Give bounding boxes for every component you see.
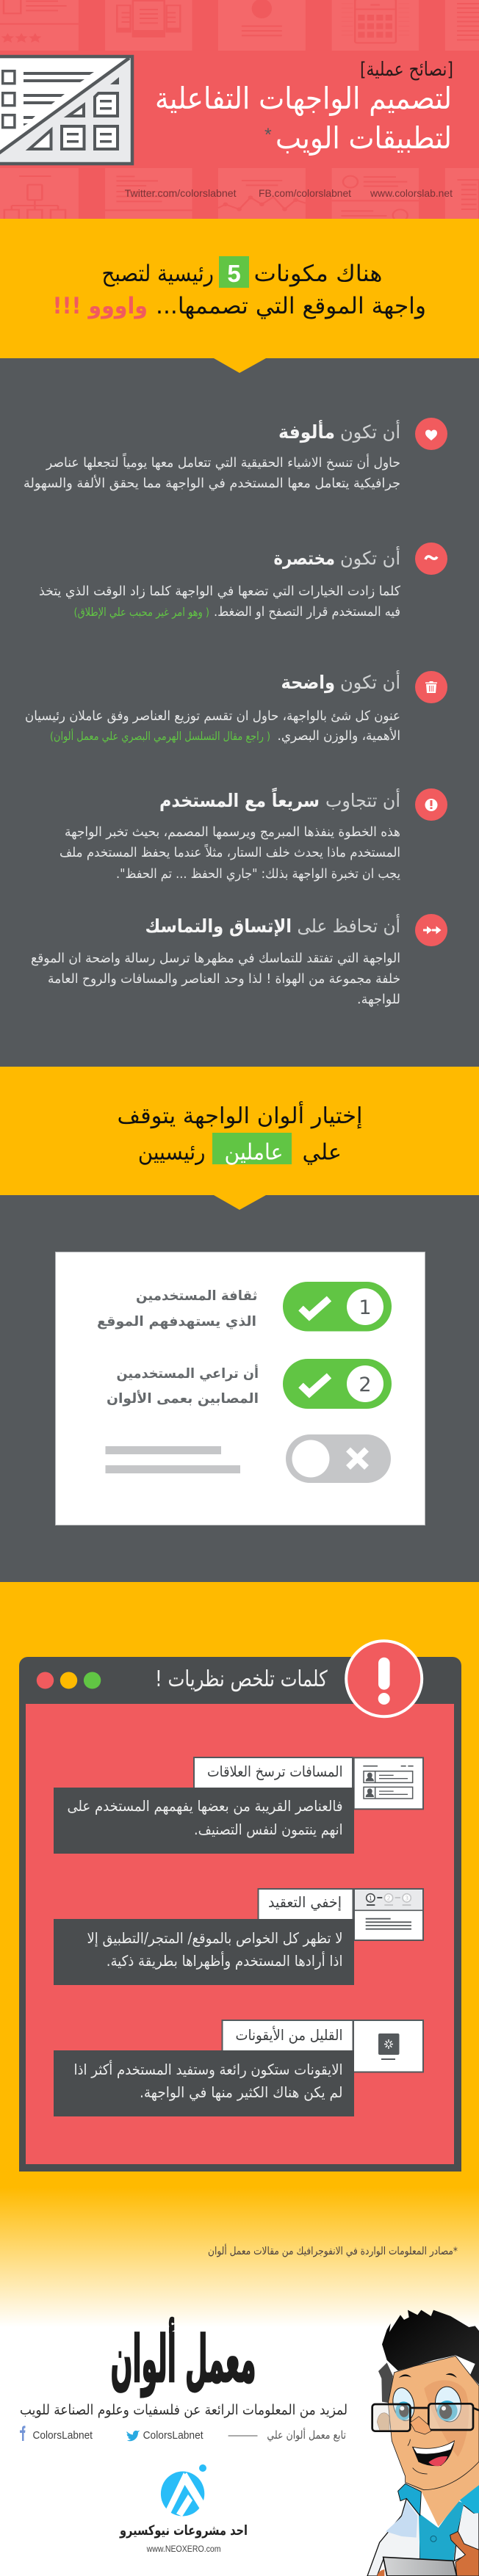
intro line 2: واووو !!! — [53, 293, 148, 319]
panel: colors banner — [0, 1067, 479, 1195]
icon: alert badge — [346, 1641, 422, 1716]
factor 1 text — [97, 1288, 257, 1330]
item 4: سريعاً مع المستخدم — [159, 788, 320, 812]
background pattern: top tiles — [0, 0, 479, 51]
icon: steps: 3 — [405, 1895, 408, 1901]
description: لم يكن هناك الكثير منها في الواجهة. — [140, 2083, 342, 2102]
twitter handle: ColorsLabnet — [143, 2429, 204, 2442]
intro line 1: هناك مكونات — [254, 261, 382, 287]
intro line 1: رئيسية لتصبح — [101, 261, 214, 287]
panel: five components — [0, 358, 479, 1067]
asterisk: * — [264, 125, 272, 145]
placeholder lines — [106, 1446, 240, 1473]
window title: كلمات تلخص نظريات ! — [155, 1666, 328, 1692]
character: scientist — [367, 2310, 479, 2576]
title line 2: لتطبيقات الويب — [275, 120, 452, 156]
heading line 2: علي — [303, 1139, 342, 1166]
description: الايقونات ستكون رائعة وستفيد المستخدم أكثر اذا — [73, 2060, 342, 2078]
arrow — [214, 358, 266, 373]
description — [54, 1919, 354, 1985]
social links: Twitter.com/colorslabnet — [125, 187, 237, 199]
social links: FB.com/colorslabnet — [259, 187, 351, 199]
item 2: أن تكون — [340, 545, 400, 569]
item 5 — [31, 913, 447, 1007]
hand — [450, 2531, 479, 2576]
eye right — [433, 2385, 464, 2423]
number badge: 5 — [227, 260, 241, 287]
item 4 — [60, 788, 447, 882]
nose — [410, 2417, 431, 2434]
back hair — [378, 2362, 393, 2403]
toggle 2: 2 — [359, 1374, 372, 1396]
social links: www.colorslab.net — [370, 187, 453, 199]
heading line 2: رئيسيين — [138, 1139, 205, 1166]
mouth — [413, 2441, 454, 2466]
ear — [377, 2413, 389, 2431]
description — [54, 1788, 354, 1854]
item 2: مختصرة — [273, 548, 335, 570]
heading line 2 — [138, 1133, 342, 1166]
item 2: فيه المستخدم قرار التصفح او الضغط. — [214, 604, 400, 620]
item 4: أن تتجاوب — [325, 788, 400, 812]
panel: theories section background — [0, 1582, 479, 2327]
panel: color factors — [0, 1195, 479, 1582]
intro line 2: واجهة الموقع التي تصممها... — [156, 293, 426, 319]
item 5: الواجهة التي تفتقد للتماسك في مظهرها ترسل رسالة واضحة ان الموقع — [31, 951, 400, 966]
item 5: الإتساق والتماسك — [145, 915, 292, 937]
icon: alert — [415, 788, 447, 821]
item 2: ( وهو امر غير محبب علي الإطلاق) — [73, 606, 209, 620]
item 1: مألوفة — [278, 420, 335, 443]
icon: twitter — [126, 2430, 140, 2441]
item 1: حاول أن تنسخ الاشياء الحقيقية التي تتعامل معها يومياً لتجعلها عناصر — [46, 453, 400, 471]
item 2: كلما زادت الخيارات التي تضعها في الواجهة كلما زاد الوقت الذي يتخذ — [39, 584, 400, 599]
follow row — [20, 2426, 346, 2442]
item 5: خلفة مجموعة من الهواة ! لذا وحد العناصر والمسافات والروح العامة — [48, 971, 400, 987]
facebook handle: ColorsLabnet — [32, 2429, 93, 2442]
coat — [367, 2498, 420, 2576]
item 1: جرافيكية يتعامل معها المستخدم في الواجهة مما يحقق الألفة والسهولة — [24, 475, 400, 491]
icon: facebook — [20, 2426, 25, 2441]
panel: window — [19, 1641, 461, 2172]
toggle 3 — [286, 1434, 391, 1483]
label: القليل من الأيقونات — [235, 2026, 342, 2044]
description: لا تظهر كل الخواص بالموقع/ المتجر/التطبيق إلا — [87, 1929, 342, 1948]
panel: intro banner — [0, 219, 479, 358]
background pattern: bottom tiles — [0, 168, 479, 222]
card: spacing — [54, 1757, 423, 1854]
description — [54, 2050, 354, 2116]
heading line 1: إختيار ألوان الواجهة يتوقف — [118, 1100, 363, 1129]
face — [388, 2356, 479, 2490]
label — [222, 2020, 353, 2051]
icon: arrows — [415, 914, 447, 946]
toggle 2 — [283, 1359, 392, 1409]
shirt — [419, 2501, 464, 2561]
icon: steps: 1 — [369, 1895, 372, 1901]
item 4: يجب ان تخبرة الواجهة بذلك: "جاري الحفظ ... تم الحفظ". — [116, 866, 400, 882]
icon: heart — [415, 418, 447, 450]
heading line 2: عاملين — [225, 1139, 284, 1166]
icon: wave — [415, 543, 447, 575]
icon: steps — [354, 1889, 423, 1940]
item 4: هذه الخطوة ينفذها المبرمج ويرسمها المصمم، بحيث تخبر الواجهة — [65, 824, 400, 840]
item 3: الأهمية، والوزن البصري. — [278, 728, 400, 744]
panel: header — [0, 0, 479, 222]
item 3: أن تكون — [340, 670, 400, 693]
toggle 1 — [283, 1282, 392, 1332]
label: إخفي التعقيد — [268, 1893, 342, 1912]
label: المسافات ترسخ العلاقات — [207, 1763, 342, 1780]
item 1 — [24, 418, 447, 491]
arrow — [214, 1195, 266, 1210]
chin line — [408, 2439, 428, 2474]
footer tagline: لمزيد من المعلومات الرائعة عن فلسفيات وعلوم الصناعة للويب — [20, 2402, 347, 2418]
description: اذا أرادها المستخدم وأظهراها بطريقة ذكية. — [107, 1951, 342, 1970]
icon: spinner tile — [353, 2020, 423, 2072]
glasses — [372, 2403, 473, 2431]
item 2 — [39, 543, 447, 620]
item 3 — [25, 670, 447, 744]
icon: list — [354, 1757, 423, 1809]
neoxero url: www.NEOXERO.com — [146, 2544, 221, 2554]
toggle 1: 1 — [359, 1296, 372, 1319]
factor 2 text: المصابين بعمى الألوان — [107, 1390, 259, 1407]
item 4: المستخدم ماذا يحدث خلف الستار، مثلاً عندما يحفظ المستخدم ملف — [60, 843, 400, 860]
factor 1 text: ثقافة المستخدمين — [136, 1288, 257, 1304]
title line 1: لتصميم الواجهات التفاعلية — [155, 81, 452, 116]
neck — [406, 2457, 479, 2527]
item 3: واضحة — [281, 672, 335, 694]
neoxero tagline: احد مشروعات نيوكسيرو — [119, 2523, 248, 2539]
factor 2 text: أن تراعي المستخدمين — [116, 1365, 259, 1382]
icon: wireframe — [0, 57, 132, 164]
description: انهم ينتمون لنفس التصنيف. — [194, 1821, 342, 1838]
label: practical tips: [نصائح عملية] — [360, 59, 453, 81]
tablet — [383, 2557, 457, 2576]
logo: colors lab: معمل ألوان — [110, 2318, 256, 2398]
eye left — [390, 2386, 417, 2423]
item 5: أن تحافظ على — [297, 913, 400, 937]
hair — [382, 2310, 479, 2384]
description: فالعناصر القريبة من بعضها يفهمهم المستخدم على — [68, 1797, 342, 1815]
label — [259, 1889, 353, 1920]
eyebrows — [399, 2373, 457, 2378]
follow row: تابع معمل ألوان علي — [267, 2428, 346, 2442]
item 1: أن تكون — [340, 419, 400, 443]
logo: neoxero — [161, 2464, 209, 2517]
item 5: للواجهة. — [357, 992, 400, 1007]
card: hide complexity — [54, 1889, 423, 1985]
item 3: ( راجع مقال التسلسل الهرمي البصري علي معمل ألوان) — [50, 728, 270, 744]
icon: steps: 2 — [386, 1895, 391, 1901]
item 3: عنون كل شئ بالواجهة، حاول ان تقسم توزيع العناصر وفق عاملان رئيسيان — [25, 708, 400, 724]
factor 2 text — [107, 1365, 259, 1407]
icon: trash — [415, 671, 447, 703]
intro line 1 — [101, 261, 382, 287]
label — [194, 1757, 353, 1788]
window dots — [37, 1672, 101, 1688]
social links — [125, 187, 453, 199]
number badge — [219, 256, 249, 288]
card: few icons — [54, 2020, 423, 2116]
factor 1 text: الذي يستهدفهم الموقع — [97, 1314, 256, 1330]
card — [56, 1252, 425, 1525]
